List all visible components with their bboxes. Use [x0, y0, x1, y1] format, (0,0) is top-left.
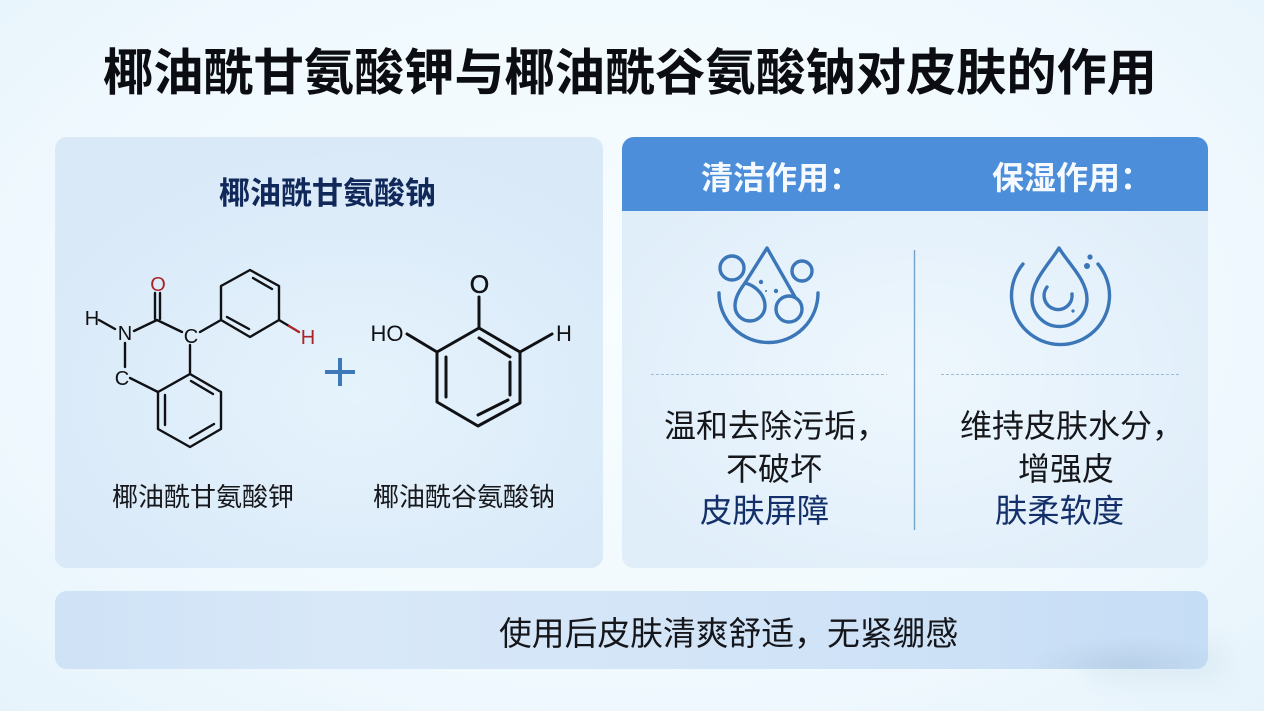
moisturizing text: 肤柔软度	[995, 493, 1124, 529]
panel: ingredients	[55, 137, 603, 568]
moisturizing text: 维持皮肤水分，	[960, 408, 1184, 444]
cleansing text	[664, 408, 888, 529]
title: 椰油酰甘氨酸钾与椰油酰谷氨酸钠对皮肤的作用	[103, 45, 1157, 101]
molecule label left: 椰油酰甘氨酸钾	[112, 482, 294, 512]
molecule right: O	[470, 271, 489, 299]
molecule left	[85, 270, 315, 447]
moisturizing text: 增强皮	[1018, 451, 1114, 487]
summary text: 使用后皮肤清爽舒适，无紧绷感	[499, 615, 958, 652]
moisturizing text	[960, 408, 1184, 529]
molecule left: N	[118, 323, 132, 345]
header: moisturizing: 保湿作用：	[992, 160, 1152, 196]
cleansing text: 皮肤屏障	[700, 493, 829, 529]
molecule left: C	[184, 326, 198, 348]
cleansing text: 温和去除污垢，	[664, 408, 888, 444]
panel: effects	[622, 137, 1208, 568]
molecule left: O	[150, 274, 166, 296]
molecule right: H	[556, 321, 572, 346]
molecule left: H	[85, 308, 99, 330]
molecule right	[370, 271, 572, 426]
summary bar	[55, 591, 1208, 669]
cleansing text: 不破坏	[726, 451, 822, 487]
icon: cleansing drop and bubbles	[719, 248, 818, 342]
molecule right: HO	[370, 321, 404, 346]
panel header	[622, 137, 1208, 211]
molecule left: C	[115, 368, 129, 390]
plus sign	[325, 358, 355, 386]
header: cleansing: 清洁作用：	[701, 160, 861, 196]
molecule label right: 椰油酰谷氨酸钠	[373, 482, 555, 512]
icon: moisture drop	[1012, 248, 1110, 345]
panel heading: 椰油酰甘氨酸钠	[219, 176, 436, 211]
molecule left: H	[301, 327, 315, 349]
